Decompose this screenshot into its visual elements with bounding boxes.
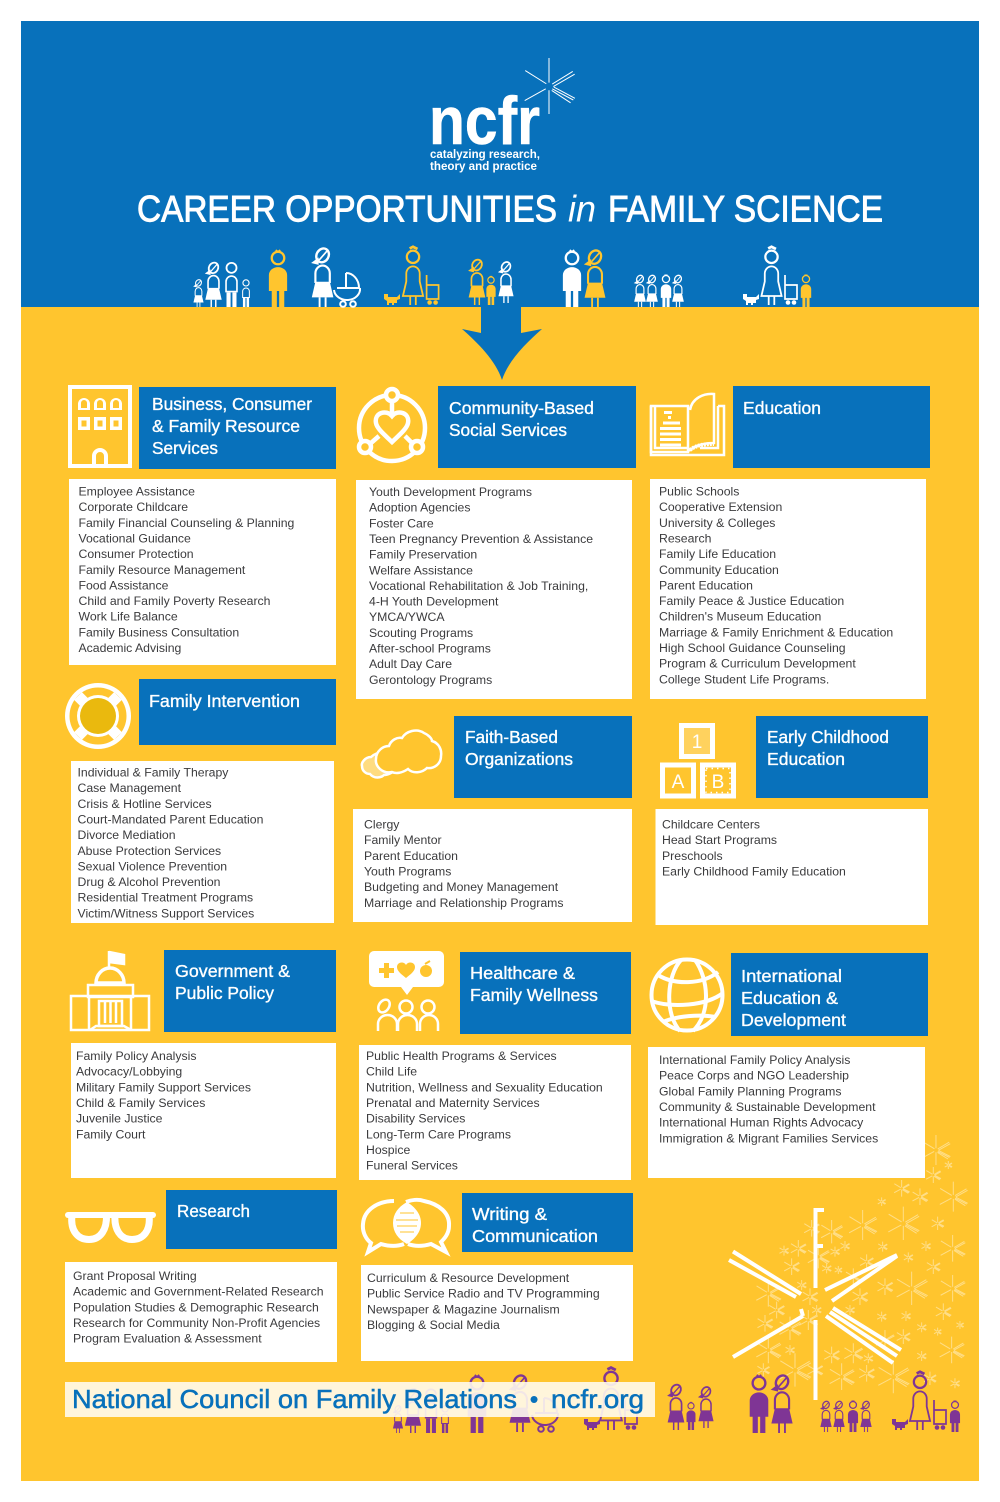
list: Gerontology Programs [369,673,492,687]
heading: Services [152,438,218,458]
icon: office building [70,387,130,467]
list: Parent Education [364,849,458,863]
list: Academic Advising [78,641,182,655]
icon: globe [651,960,723,1031]
icon: alphabet blocks: 1 [692,732,702,753]
logo: ncfr: ncfr [429,83,540,159]
list: Population Studies & Demographic Research [73,1300,319,1314]
list box [656,809,928,925]
panel: writing [361,1193,633,1361]
list: Global Family Planning Programs [659,1084,841,1098]
list box [650,479,926,699]
icon: speech bubble with people [369,951,444,1031]
heading: Education [743,398,821,418]
list: Food Assistance [78,578,169,592]
icon: community circle heart [359,389,425,461]
list: Court-Mandated Parent Education [78,812,264,826]
heading: Communication [472,1226,598,1246]
list box [359,1045,631,1180]
list: Public Schools [659,484,739,498]
list: Divorce Mediation [78,828,176,842]
icon: clouds [362,731,441,778]
list: Corporate Childcare [78,500,188,514]
list: Clergy [364,818,400,832]
list: Research for Community Non-Profit Agencies [73,1316,320,1330]
list: Family Mentor [364,833,442,847]
heading bar [460,952,631,1034]
list: International Human Rights Advocacy [659,1116,864,1130]
heading bar [166,1190,337,1249]
logo: ncfr: catalyzing research, [430,147,540,161]
list: YMCA/YWCA [369,610,445,624]
icon: life ring [65,683,131,749]
heading: Business, Consumer [152,394,312,414]
icon: alphabet blocks: B [712,772,724,793]
heading: Early Childhood [767,727,889,747]
panel: business [69,387,336,665]
heading: Development [741,1010,846,1030]
footer text: ncfr.org [551,1384,644,1414]
list: Early Childhood Family Education [662,864,846,878]
panel: family intervention [65,679,336,923]
list box [69,479,336,665]
list: Family Policy Analysis [76,1049,196,1063]
list: Victim/Witness Support Services [78,906,254,920]
list box [353,809,632,922]
list: Case Management [78,781,182,795]
list box [71,761,334,923]
list: Head Start Programs [662,833,777,847]
title: CAREER OPPORTUNITIES [137,188,557,230]
heading: Organizations [465,749,573,769]
list: Family Life Education [659,547,776,561]
list: High School Guidance Counseling [659,641,846,655]
list: Prenatal and Maternity Services [366,1096,540,1110]
heading: Public Policy [175,983,274,1003]
list: Youth Development Programs [369,485,532,499]
heading: Community-Based [449,398,594,418]
list: Child Life [366,1065,417,1079]
list: 4-H Youth Development [369,595,499,609]
list: Funeral Services [366,1159,458,1173]
list: Disability Services [366,1112,465,1126]
list: Advocacy/Lobbying [76,1065,182,1079]
footer people illustration [393,1368,960,1433]
list: Preschools [662,849,723,863]
list box [361,1265,633,1361]
heading bar [139,679,336,745]
heading: Research [177,1201,250,1221]
footer bar [65,1382,655,1417]
title: in [568,188,596,230]
list: Blogging & Social Media [367,1318,500,1332]
list: After-school Programs [369,642,491,656]
list: Cooperative Extension [659,500,782,514]
footer text: National Council on Family Relations [72,1384,517,1414]
icon: overlapping speech bubbles [363,1200,449,1252]
list: Teen Pregnancy Prevention & Assistance [369,532,593,546]
heading: International [741,966,842,986]
header band [21,21,979,307]
panel: education [650,386,930,699]
heading bar [164,950,336,1032]
heading: Education [767,749,845,769]
icon: glasses [68,1215,153,1240]
list box [65,1262,337,1362]
list: Family Resource Management [78,563,246,577]
arrow [462,306,542,380]
list: Child and Family Poverty Research [78,594,271,608]
list: Military Family Support Services [76,1080,251,1094]
list: Nutrition, Wellness and Sexuality Education [366,1080,603,1094]
snowflake pattern [756,1135,968,1393]
icon: alphabet blocks: A [672,772,685,793]
list: Sexual Violence Prevention [78,859,227,873]
header people illustration [193,246,811,307]
list: Drug & Alcohol Prevention [78,875,221,889]
list: College Student Life Programs. [659,672,829,686]
list: Youth Programs [364,864,451,878]
list: Hospice [366,1143,410,1157]
heading: Education & [741,988,838,1008]
list: Grant Proposal Writing [73,1269,197,1283]
heading: Healthcare & [470,963,575,983]
panel: community [356,386,636,699]
poster background [21,307,979,1481]
icon: open book [651,394,724,455]
list: Family Business Consultation [78,625,239,639]
heading bar [454,716,632,798]
heading bar [462,1193,633,1252]
panel: faith [353,716,632,922]
list: Vocational Rehabilitation & Job Training, [369,579,588,593]
heading: Faith-Based [465,727,558,747]
list: Immigration & Migrant Families Services [659,1131,878,1145]
list: Residential Treatment Programs [78,891,253,905]
list: Family Court [76,1127,146,1141]
heading: Family Wellness [470,985,598,1005]
list: Academic and Government-Related Research [73,1285,324,1299]
list: Public Health Programs & Services [366,1049,557,1063]
list: Crisis & Hotline Services [78,797,212,811]
list: Community Education [659,563,779,577]
heading: Government & [175,961,290,981]
panel: international [648,953,928,1178]
panel: government [71,950,336,1178]
list: Children's Museum Education [659,610,822,624]
list: Vocational Guidance [78,531,191,545]
list: Budgeting and Money Management [364,880,559,894]
heading: & Family Resource [152,416,300,436]
icon: capitol building [71,951,149,1030]
list: Research [659,531,712,545]
list: Childcare Centers [662,818,760,832]
panel: healthcare [359,951,631,1180]
heading: Writing & [472,1204,547,1224]
list: Peace Corps and NGO Leadership [659,1069,849,1083]
heading: Social Services [449,420,567,440]
title: FAMILY SCIENCE [608,188,883,230]
heading: Family Intervention [149,691,300,711]
heading bar [139,387,336,469]
list: Public Service Radio and TV Programming [367,1287,600,1301]
list box [356,480,632,699]
heading bar [731,953,928,1036]
list: Welfare Assistance [369,563,473,577]
list: International Family Policy Analysis [659,1053,850,1067]
footer text: • [529,1384,539,1414]
list: Curriculum & Resource Development [367,1271,570,1285]
heading bar [438,386,636,468]
list: Community & Sustainable Development [659,1100,876,1114]
list: Scouting Programs [369,626,473,640]
panel: early childhood [656,716,928,925]
list: Program Evaluation & Assessment [73,1332,262,1346]
list: Consumer Protection [78,547,194,561]
icon: alphabet blocks [662,726,734,796]
list: Marriage & Family Enrichment & Education [659,625,893,639]
list: Marriage and Relationship Programs [364,896,564,910]
list: Abuse Protection Services [78,844,221,858]
list: Long-Term Care Programs [366,1127,511,1141]
list: Foster Care [369,516,434,530]
list: Work Life Balance [78,610,178,624]
list: Juvenile Justice [76,1112,163,1126]
list: Family Preservation [369,548,477,562]
list: Newspaper & Magazine Journalism [367,1302,560,1316]
list: Individual & Family Therapy [78,766,229,780]
list: Adoption Agencies [369,501,470,515]
title [137,188,883,230]
list: Parent Education [659,578,753,592]
list: University & Colleges [659,516,775,530]
panel: research [65,1190,337,1362]
list: Family Peace & Justice Education [659,594,844,608]
list box [71,1043,336,1178]
list: Child & Family Services [76,1096,205,1110]
large snowflake [729,1210,901,1400]
list: Family Financial Counseling & Planning [78,516,295,530]
list box [648,1047,925,1178]
logo: ncfr: theory and practice [430,159,537,173]
list: Adult Day Care [369,657,452,671]
heading bar [756,716,928,798]
list: Employee Assistance [78,484,195,498]
heading bar [733,386,930,468]
logo: ncfr [429,58,575,173]
list: Program & Curriculum Development [659,657,856,671]
